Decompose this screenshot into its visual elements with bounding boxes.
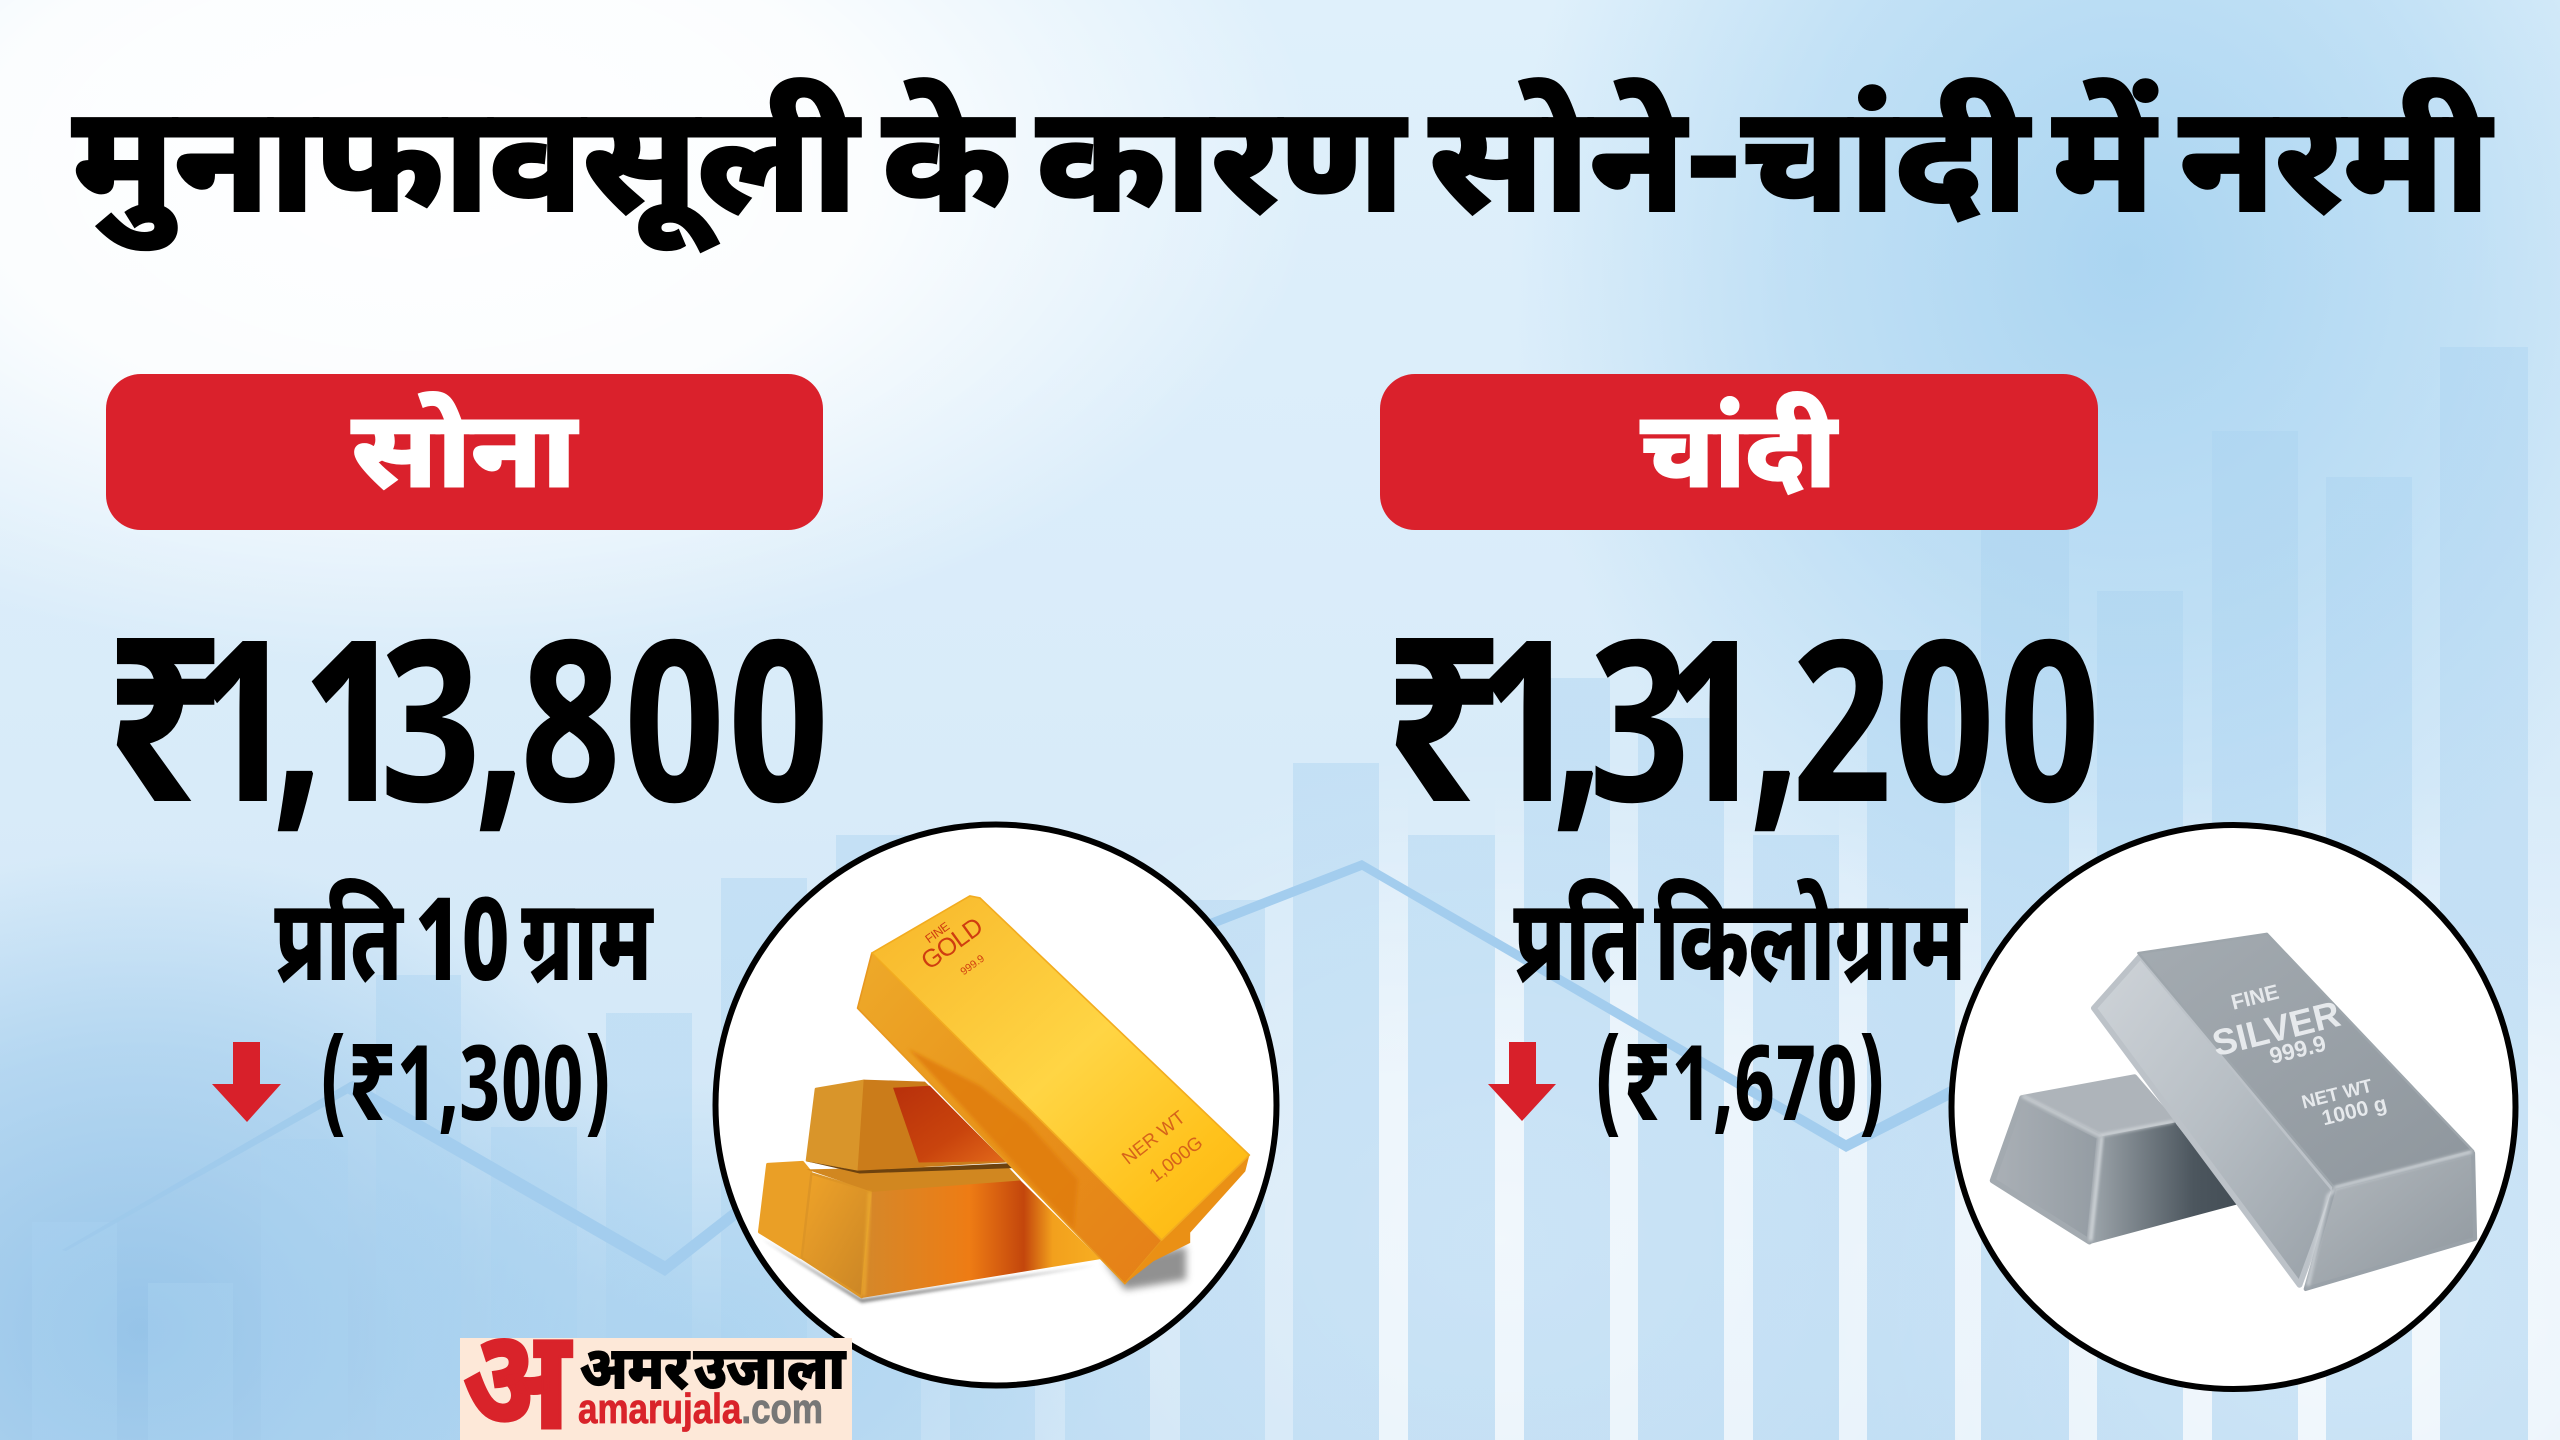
- silver unit: प्रति किलोग्राम: [1514, 878, 1967, 1025]
- heading pill: silver: चांदी: [1641, 392, 1838, 529]
- silver price: 1,31,200: [1476, 601, 2101, 893]
- icon: silver bars in circle: NET WT: [2299, 1075, 2375, 1113]
- logo: Amar Ujala: [460, 1304, 852, 1440]
- icon: silver bars in circle: FINE: [2229, 981, 2281, 1015]
- gold change: (₹1,300): [319, 1011, 612, 1170]
- icon: gold bars in circle: 999.9: [958, 953, 987, 978]
- gold unit: प्रति 10 ग्राम: [275, 878, 653, 1025]
- arrow: gold decline: [212, 1042, 281, 1122]
- lower bar: [760, 1162, 811, 1257]
- heading pill: silver: [1380, 374, 2098, 530]
- heading pill: gold: [106, 374, 823, 530]
- icon: gold bars in circle: 1,000G: [1145, 1132, 1206, 1186]
- bar chart backdrop: [32, 347, 2560, 1440]
- heading pill: gold: सोना: [352, 392, 579, 529]
- large bar: [858, 953, 1162, 1284]
- icon: silver bars in circle: 999.9: [2267, 1030, 2329, 1069]
- upper bar: [2094, 956, 2334, 1285]
- icon: gold bars in circle: GOLD: [916, 912, 988, 975]
- trend line: [62, 1082, 354, 1251]
- icon: silver bars in circle: 1000 g: [2320, 1092, 2389, 1130]
- icon: gold bars in circle: [716, 824, 1276, 1386]
- logo: Amar Ujala: अमर उजाला: [580, 1336, 846, 1412]
- gold price: 1,13,800: [192, 601, 830, 893]
- arrow: silver decline: [1488, 1042, 1556, 1121]
- silver change: (₹1,670): [1594, 1011, 1886, 1170]
- gold price: ₹: [104, 567, 225, 909]
- panel: gold: [104, 374, 830, 1170]
- lower bar: [2024, 1078, 2173, 1137]
- icon: gold bars in circle: NER WT: [1118, 1106, 1189, 1168]
- upper small bar: [807, 1081, 869, 1169]
- icon: gold bars in circle: FINE: [923, 919, 952, 946]
- silver price: ₹: [1383, 567, 1504, 909]
- logo: Amar Ujala: amarujala.com: [578, 1385, 823, 1432]
- icon: silver bars in circle: SILVER: [2208, 993, 2344, 1064]
- panel: silver: [1380, 374, 2101, 1170]
- icon: silver bars in circle: [1952, 825, 2516, 1389]
- title: मुनाफावसूली के कारण सोने-चांदी में नरमी: [73, 79, 2493, 270]
